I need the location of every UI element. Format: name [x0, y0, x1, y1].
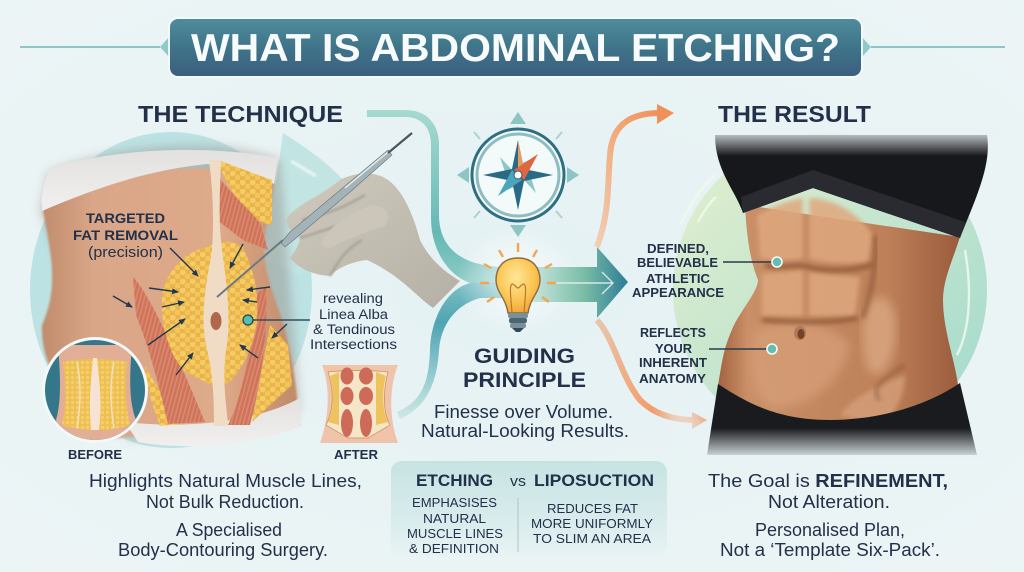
heading: the technique: THE TECHNIQUE	[138, 101, 343, 127]
illustration: abdomen anatomy	[40, 146, 302, 446]
muscle lower right	[228, 287, 266, 425]
callout: inherent anatomy: YOUR	[655, 341, 693, 356]
glove	[287, 174, 460, 308]
panel text: liposuction: TO SLIM AN AREA	[533, 531, 651, 546]
callout: defined appearance: BELIEVABLE	[637, 255, 718, 270]
panel heading: liposuction: LIPOSUCTION	[534, 471, 654, 490]
panel text: liposuction: REDUCES FAT	[547, 501, 638, 516]
shorts	[707, 383, 977, 455]
callout: inherent anatomy	[639, 325, 777, 386]
callout: defined appearance: APPEARANCE	[632, 285, 724, 300]
label: before: BEFORE	[68, 447, 122, 462]
panel text: etching: MUSCLE LINES	[407, 526, 503, 541]
flow arrows	[367, 104, 707, 429]
muscle upper right	[217, 176, 268, 250]
panel: etching vs liposuction	[391, 461, 667, 557]
panel text: liposuction	[531, 501, 653, 546]
technique text	[89, 471, 362, 560]
panel text: liposuction: MORE UNIFORMLY	[531, 516, 653, 531]
title banner	[20, 17, 1005, 78]
heading: guiding principle: GUIDING	[474, 344, 575, 368]
hand with instrument	[217, 133, 460, 308]
panel text: etching: NATURAL	[423, 511, 486, 526]
inset: after	[320, 365, 398, 443]
callout: linea alba: Intersections	[310, 337, 397, 352]
bottom fade	[695, 428, 990, 460]
result text: Not Alteration.	[768, 492, 890, 512]
panel text: etching: EMPHASISES	[412, 495, 497, 510]
skin	[718, 205, 960, 425]
panel heading: etching: ETCHING	[416, 471, 493, 490]
fat central	[162, 242, 257, 388]
technique text: Highlights Natural Muscle Lines,	[89, 471, 362, 491]
fat lateral right	[252, 325, 292, 422]
navel	[210, 312, 222, 330]
muscle lower left	[133, 277, 205, 424]
label: targeted fat removal	[73, 210, 178, 261]
callout: inherent anatomy: REFLECTS	[640, 325, 706, 340]
technique text: Body-Contouring Surgery.	[118, 540, 328, 560]
glow around bulb	[456, 225, 580, 335]
circle backdrop: technique	[30, 132, 345, 448]
result text: Personalised Plan,	[755, 520, 905, 540]
callout: linea alba: & Tendinous	[313, 322, 395, 337]
arrow: after to principle	[397, 282, 510, 419]
fat upper right	[218, 160, 272, 225]
abs shading	[751, 198, 905, 425]
lower band	[125, 398, 302, 446]
heading: the result: THE RESULT	[718, 101, 871, 127]
shadow	[40, 146, 300, 440]
panel text: etching	[407, 495, 503, 556]
navel	[794, 326, 806, 340]
guiding principle text: Natural-Looking Results.	[421, 421, 629, 441]
label: after: AFTER	[334, 447, 379, 462]
upper band	[42, 150, 278, 211]
torso skin	[42, 168, 298, 440]
linea alba	[204, 160, 229, 426]
callout: linea alba: Linea Alba	[319, 307, 389, 322]
callout: linea alba: revealing	[323, 291, 383, 306]
needle	[217, 240, 283, 297]
finger shading	[300, 195, 365, 276]
instrument handle	[281, 133, 412, 247]
result text: Not a ‘Template Six-Pack’.	[720, 540, 940, 560]
fat arrows	[113, 244, 287, 375]
label: targeted fat removal: FAT REMOVAL	[73, 227, 178, 243]
crop top hem	[741, 170, 965, 238]
inset: before	[42, 337, 148, 443]
result text	[708, 471, 948, 560]
fat lateral left	[145, 365, 180, 426]
icon: light bulb	[480, 243, 556, 332]
callout: linea alba	[243, 291, 397, 352]
heading: guiding principle: PRINCIPLE	[463, 368, 586, 392]
callout: inherent anatomy: ANATOMY	[639, 371, 706, 386]
callout: inherent anatomy: INHERENT	[639, 355, 707, 370]
technique text: A Specialised	[176, 520, 282, 540]
arrow head: bottom	[692, 412, 707, 429]
icon: compass	[457, 112, 579, 237]
finger over handle	[321, 205, 388, 248]
guiding principle text: Finesse over Volume.	[434, 402, 613, 422]
panel heading: vs: vs	[510, 473, 526, 490]
label: targeted fat removal: (precision)	[88, 245, 163, 261]
callout: defined appearance: ATHLETIC	[646, 271, 711, 286]
illustration: toned abdomen	[695, 128, 1000, 460]
crop top	[715, 135, 988, 238]
arrow: principle to result top	[597, 113, 660, 247]
callout: defined appearance: DEFINED,	[647, 241, 709, 256]
label: targeted fat removal: TARGETED	[86, 210, 165, 226]
heading: guiding principle	[463, 344, 586, 392]
technique text: Not Bulk Reduction.	[146, 492, 304, 512]
big arrow	[530, 247, 628, 318]
arrow: principle to result bottom	[597, 320, 695, 420]
callout: defined appearance	[632, 241, 782, 300]
top fade	[700, 128, 1000, 156]
guiding principle text	[421, 402, 629, 441]
arrow head: top	[657, 104, 674, 124]
title: WHAT IS ABDOMINAL ETCHING?	[191, 27, 840, 70]
result text: The Goal is REFINEMENT,	[708, 471, 948, 491]
panel text: etching: & DEFINITION	[409, 541, 499, 556]
arrow: technique to principle	[367, 110, 510, 284]
circle backdrop: result	[660, 133, 987, 450]
